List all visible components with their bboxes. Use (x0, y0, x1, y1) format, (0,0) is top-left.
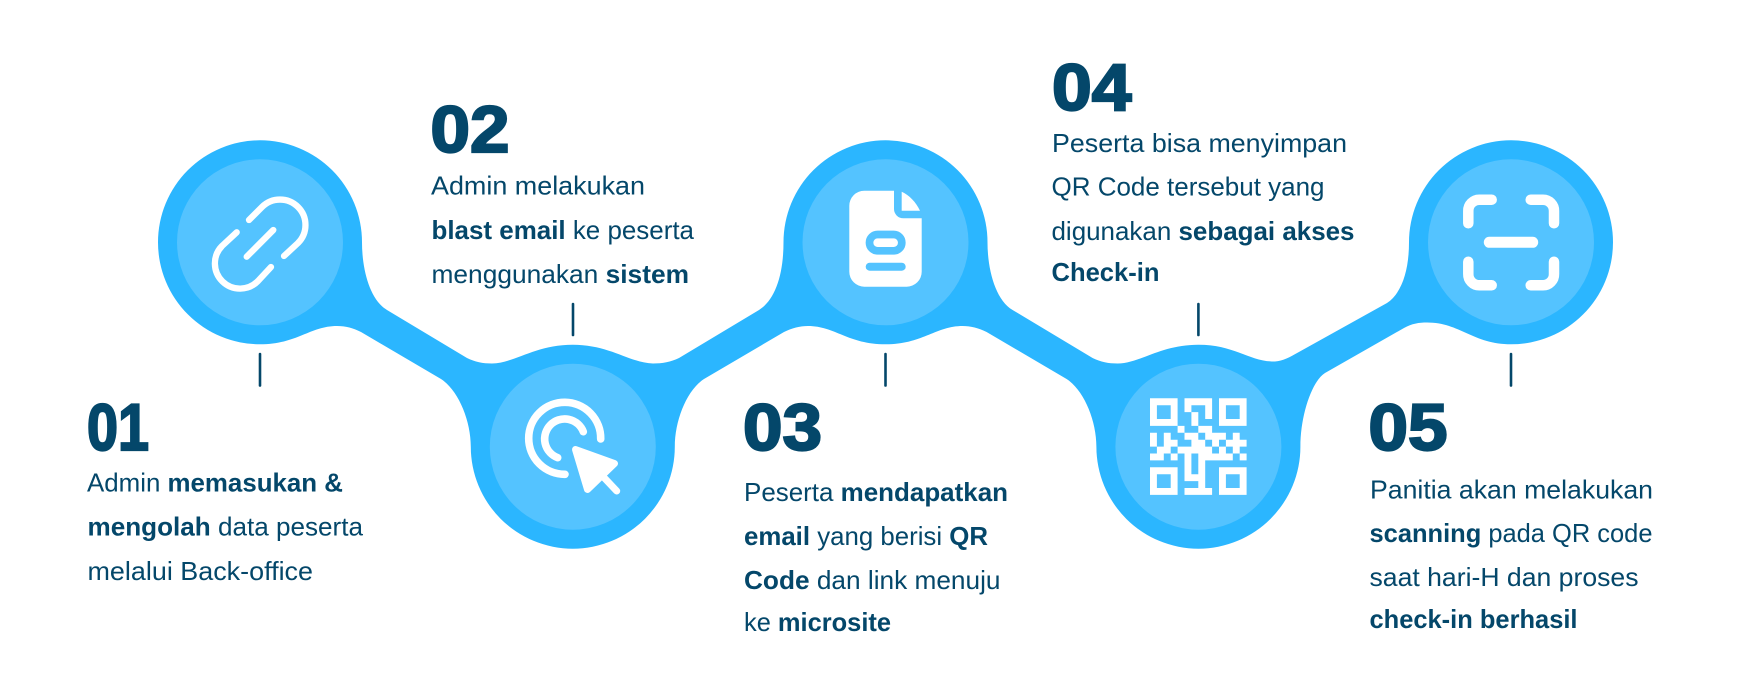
description 05: check-in berhasil (1370, 604, 1578, 634)
description 01 (87, 468, 364, 586)
description 03 (744, 477, 1008, 637)
node circle 1 (177, 159, 343, 325)
node circle 3 (802, 159, 968, 325)
number 02: 02 (430, 92, 510, 166)
step 01 (87, 159, 364, 586)
tick 1 (259, 354, 261, 386)
step 02 (430, 92, 695, 530)
node circle 2 (490, 364, 656, 530)
description 03: email yang berisi QR (744, 521, 988, 551)
step 03 (743, 159, 1008, 637)
description 05 (1370, 475, 1653, 634)
number 01: 01 (87, 390, 149, 464)
icon: QR code (1150, 398, 1247, 495)
description 04 (1052, 128, 1354, 287)
description 03: Peserta mendapatkan (744, 477, 1008, 507)
icon: document (849, 191, 922, 287)
step 05 (1368, 159, 1653, 634)
icon: scan frame (1468, 200, 1554, 285)
description 02: menggunakan sistem (432, 259, 689, 289)
description 02: blast email ke peserta (432, 215, 695, 245)
description 05: Panitia akan melakukan (1370, 475, 1653, 505)
number 05: 05 (1368, 390, 1448, 464)
description 05: saat hari-H dan proses (1370, 562, 1638, 592)
step 04 (1052, 50, 1354, 530)
connector ribbon with five nodes (158, 140, 1613, 549)
description 02: Admin melakukan (431, 171, 645, 201)
number 04: 04 (1052, 50, 1132, 124)
description 01: mengolah data peserta (88, 512, 364, 542)
node circle 4 (1115, 364, 1281, 530)
description 05: scanning pada QR code (1370, 518, 1652, 548)
node circle 5 (1428, 159, 1594, 325)
tick 2 (572, 304, 574, 335)
description 04: Check-in (1052, 257, 1160, 287)
description 02 (431, 171, 695, 289)
description 04: QR Code tersebut yang (1052, 172, 1324, 202)
description 01: melalui Back-office (88, 556, 313, 586)
icon: link (215, 200, 305, 289)
description 03: Code dan link menuju (744, 565, 1000, 595)
icon: click cursor (529, 402, 617, 491)
tick 4 (1197, 304, 1200, 335)
description 04: digunakan sebagai akses (1052, 216, 1354, 246)
description 01: Admin memasukan & (87, 468, 343, 498)
tick 5 (1510, 354, 1512, 386)
description 03: ke microsite (744, 607, 891, 637)
description 04: Peserta bisa menyimpan (1052, 128, 1347, 158)
number 03: 03 (743, 390, 822, 464)
tick 3 (884, 354, 887, 386)
